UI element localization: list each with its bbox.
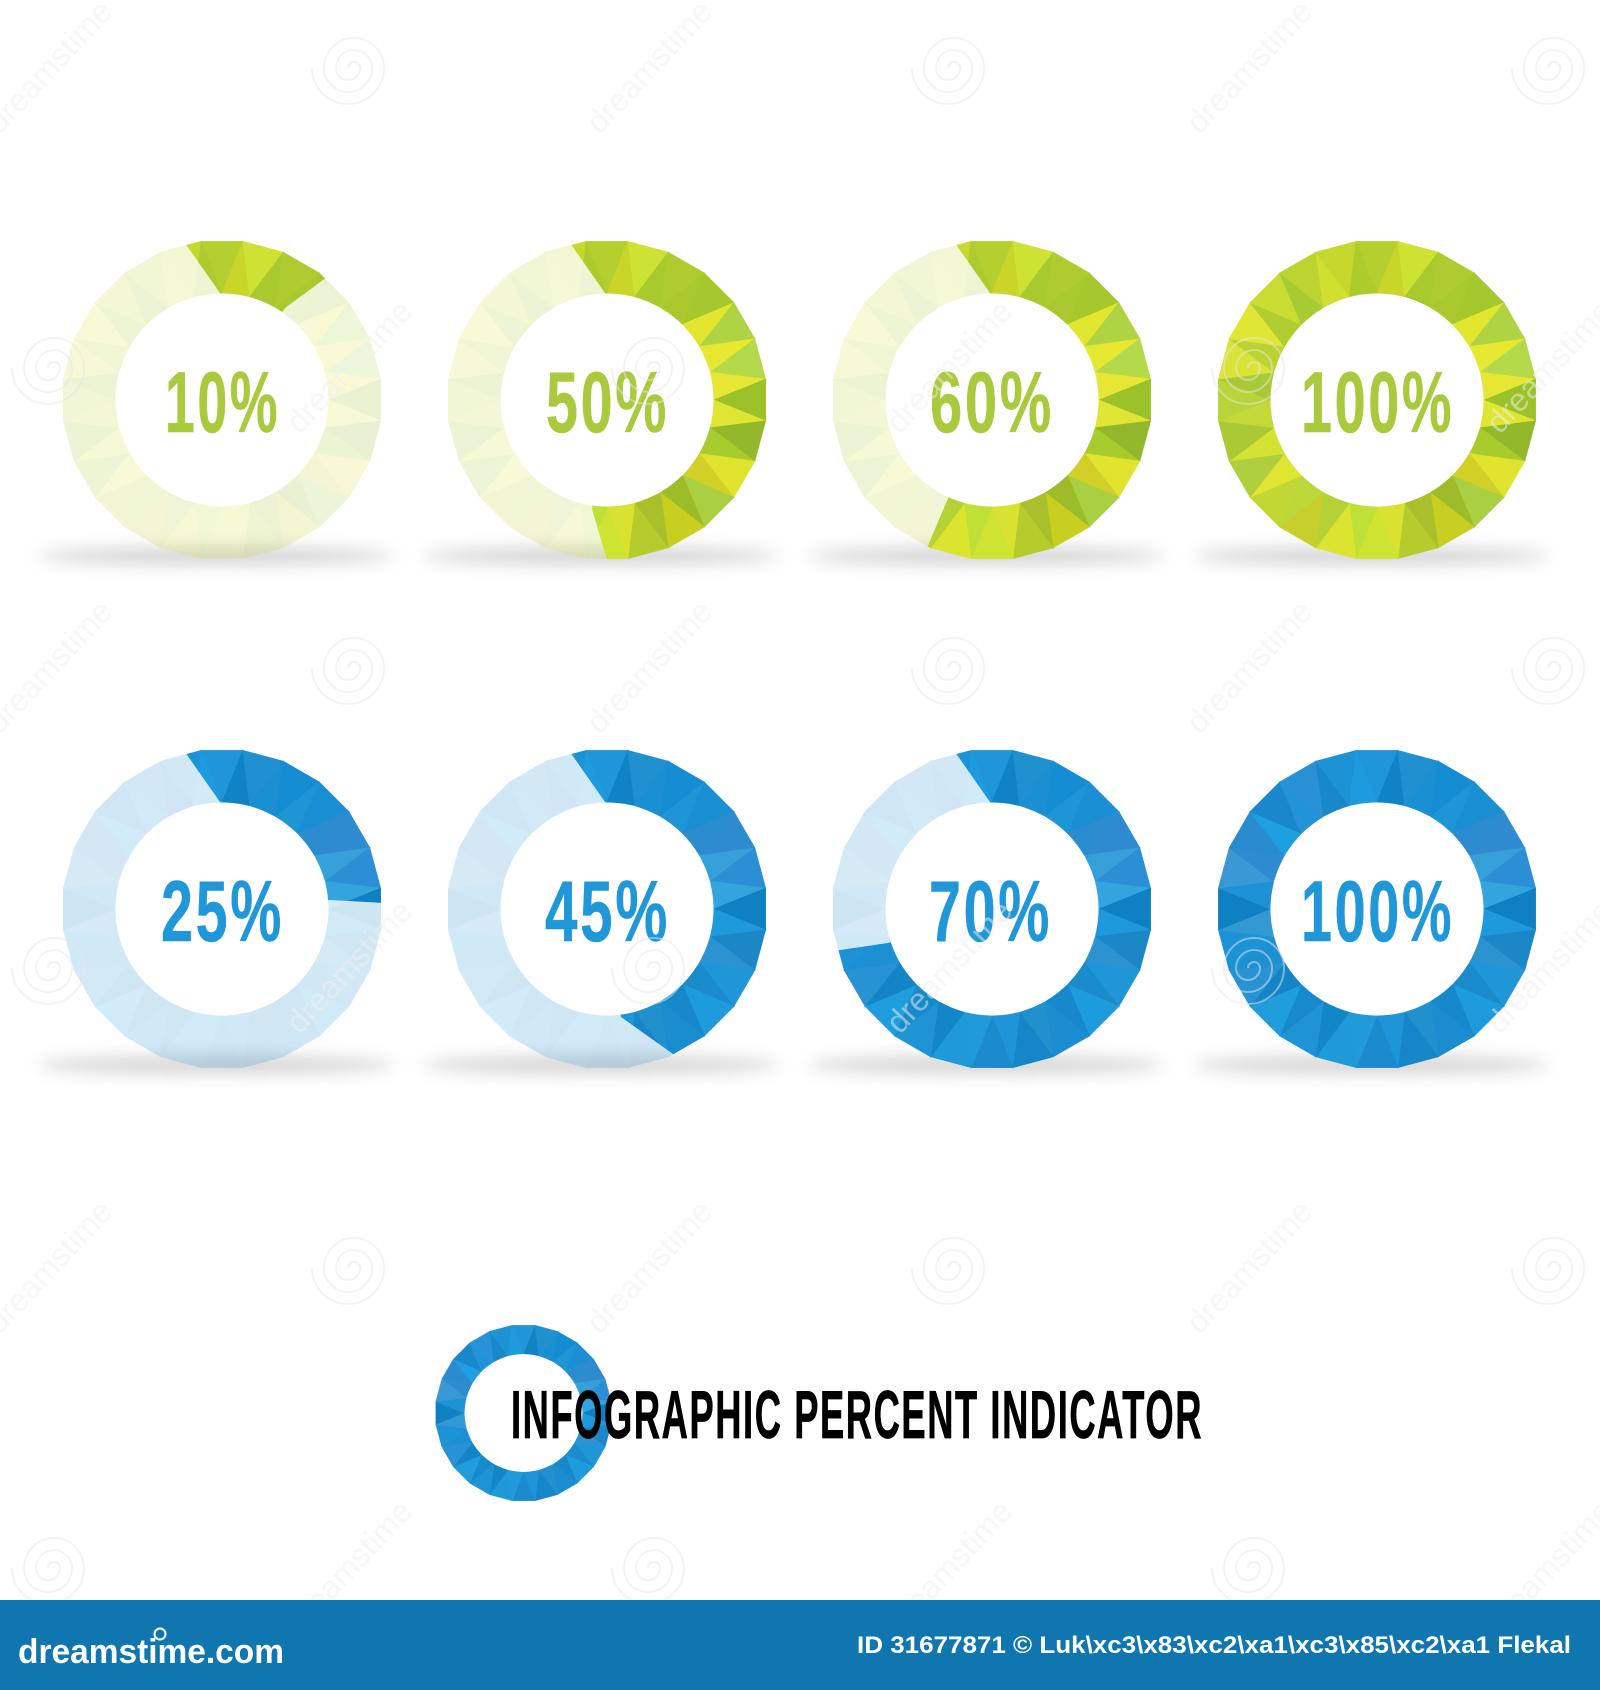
panel: blue 100% indicator: [1193, 749, 1549, 1074]
ring: 10% progress: [62, 240, 382, 560]
ring: 45% progress: [447, 749, 767, 1069]
shadow: [1193, 547, 1549, 565]
ring: 100% progress: [1217, 240, 1537, 560]
label: 25%: 25%: [161, 864, 284, 960]
watermark: diagonal text: dreamstime: [279, 1493, 419, 1640]
ring: 60% progress: [832, 240, 1152, 560]
label: 70%: 70%: [929, 864, 1052, 960]
label: 100%: 100%: [1301, 355, 1454, 451]
shadow: [423, 547, 779, 565]
footer logo: dreamstime.com: [18, 1633, 284, 1671]
ring: 100% progress: [1217, 749, 1537, 1069]
footer bar: [0, 1600, 1600, 1690]
label: 100%: 100%: [1301, 864, 1454, 960]
panel: green 60% indicator: [808, 240, 1164, 565]
shadow: [38, 1056, 394, 1074]
label: 60%: 60%: [930, 355, 1054, 451]
panel: green 50% indicator: [423, 240, 779, 565]
ring: 50% progress: [447, 240, 767, 560]
watermark: diagonal text: dreamstime: [879, 893, 1019, 1040]
panel: green 10% indicator: [38, 240, 394, 565]
watermark: diagonal text: dreamstime: [279, 893, 419, 1040]
watermark: diagonal text: dreamstime: [1179, 593, 1319, 740]
watermark: diagonal text: dreamstime: [579, 593, 719, 740]
label: 45%: 45%: [545, 864, 670, 960]
ring: 25% progress: [62, 749, 382, 1069]
watermark: diagonal text: dreamstime: [279, 293, 419, 440]
label: 10%: 10%: [165, 355, 280, 451]
shadow: [808, 547, 1164, 565]
shadow: [38, 547, 394, 565]
panel: blue 45% indicator: [423, 749, 779, 1074]
panel: green 100% indicator: [1193, 240, 1549, 565]
watermark: diagonal text: dreamstime: [1179, 1193, 1319, 1340]
panel: blue 25% indicator: [38, 749, 394, 1074]
label: 50%: 50%: [546, 355, 669, 451]
icon: small blue ring: [435, 1324, 612, 1502]
watermark: diagonal text: dreamstime: [579, 1193, 719, 1340]
footer credit: ID 31677871 © Luk\xc3\x83\xc2\xa1\xc3\x85\xc2\xa1 Flekal: [857, 1632, 1571, 1659]
ring: 70% progress: [832, 749, 1152, 1069]
shadow: [808, 1056, 1164, 1074]
watermark: diagonal text: dreamstime: [879, 293, 1019, 440]
shadow: [1193, 1056, 1549, 1074]
watermark: diagonal text: dreamstime: [879, 1493, 1019, 1640]
shadow: [423, 1056, 779, 1074]
panel: blue 70% indicator: [808, 749, 1164, 1074]
